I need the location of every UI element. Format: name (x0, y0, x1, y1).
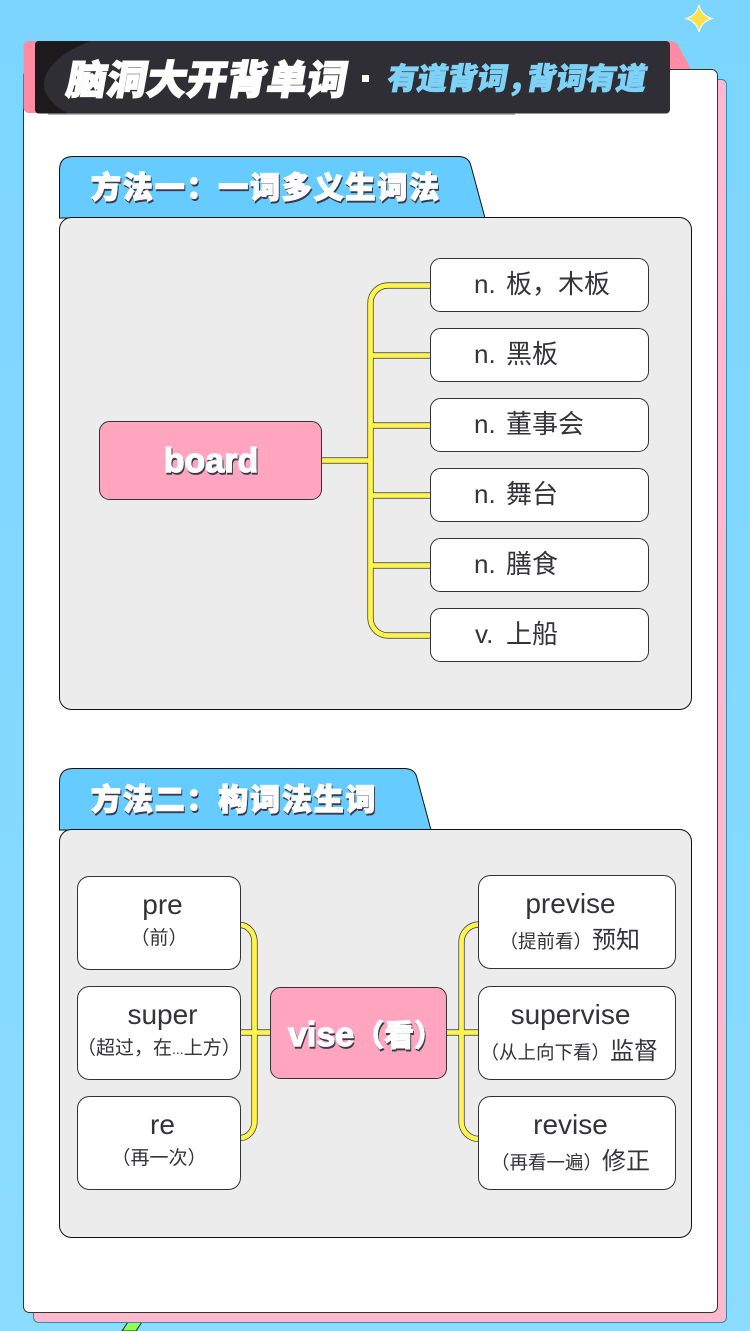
prefix: pre (78, 876, 240, 970)
header banner (24, 41, 670, 115)
prefix: re: re (150, 1109, 175, 1140)
word: previse: previse (525, 888, 616, 919)
meaning: board 5: n. (474, 549, 496, 579)
connector lines: derived words (446, 924, 479, 1139)
section: method one (60, 156, 692, 710)
title: 脑洞大开背单词 (63, 47, 353, 106)
subtitle: , (509, 54, 528, 98)
icon: green ribbon fragment (122, 1322, 142, 1331)
prefix: super: （超过，在...上方） (77, 1037, 241, 1059)
meaning: board 4: 舞台 (506, 479, 558, 509)
section: method two (60, 768, 692, 1238)
meaning: board 3: n. (474, 409, 496, 439)
meaning: board 4: n. (474, 479, 496, 509)
subtitle: 背词有道 (523, 54, 651, 98)
word: revise: revise (533, 1109, 608, 1140)
word: supervise (478, 986, 676, 1080)
meaning: board 5: 膳食 (506, 549, 558, 579)
root: vise: （看） (354, 1020, 444, 1053)
panel: method two (60, 830, 692, 1238)
prefix: super: super (127, 999, 198, 1030)
word: revise (478, 1096, 676, 1190)
prefix: re (78, 1096, 240, 1190)
meaning: board 6: v. (475, 619, 493, 649)
icon: sparkle star (686, 5, 712, 32)
node: board (100, 422, 322, 500)
meaning: board 6: 上船 (506, 619, 558, 649)
meaning: board 2 (430, 328, 648, 382)
meaning: board 4 (430, 468, 648, 522)
root: vise (270, 988, 446, 1078)
connector lines: board (322, 286, 430, 636)
subtitle: 有道背词 (384, 54, 512, 98)
word: previse: （提前看）预知 (500, 927, 640, 954)
heading: method two: 方法二：构词法生词 (91, 775, 377, 819)
meaning: board 3 (430, 398, 648, 452)
meaning: board 2: n. (474, 339, 496, 369)
root: vise: vise (288, 1016, 354, 1054)
pink header tab (24, 41, 691, 113)
panel: method one (60, 218, 692, 710)
prefix: super (77, 986, 241, 1080)
meaning: board 2: 黑板 (506, 339, 558, 369)
meaning: board 1 (430, 258, 648, 312)
meaning: board 6 (430, 608, 648, 662)
word: supervise: （从上向下看）监督 (480, 1038, 658, 1065)
prefix: re: （再一次） (111, 1147, 207, 1169)
node: board: board (164, 442, 258, 480)
heading: method one: 方法一：一词多义生词法 (91, 163, 441, 207)
meaning: board 5 (430, 538, 648, 592)
meaning: board 1: 板，木板 (506, 269, 610, 299)
prefix: pre: （前） (130, 927, 188, 949)
tab: method one (60, 156, 485, 218)
prefix: pre: pre (142, 889, 183, 920)
word: previse (478, 876, 676, 968)
meaning: board 3: 董事会 (506, 409, 584, 439)
title dot (362, 75, 369, 82)
tab: method two (60, 768, 431, 830)
connector lines: prefixes (240, 925, 271, 1138)
word: supervise: supervise (511, 999, 630, 1030)
meaning: board 1: n. (474, 269, 496, 299)
word: revise: （再看一遍）修正 (491, 1148, 650, 1175)
